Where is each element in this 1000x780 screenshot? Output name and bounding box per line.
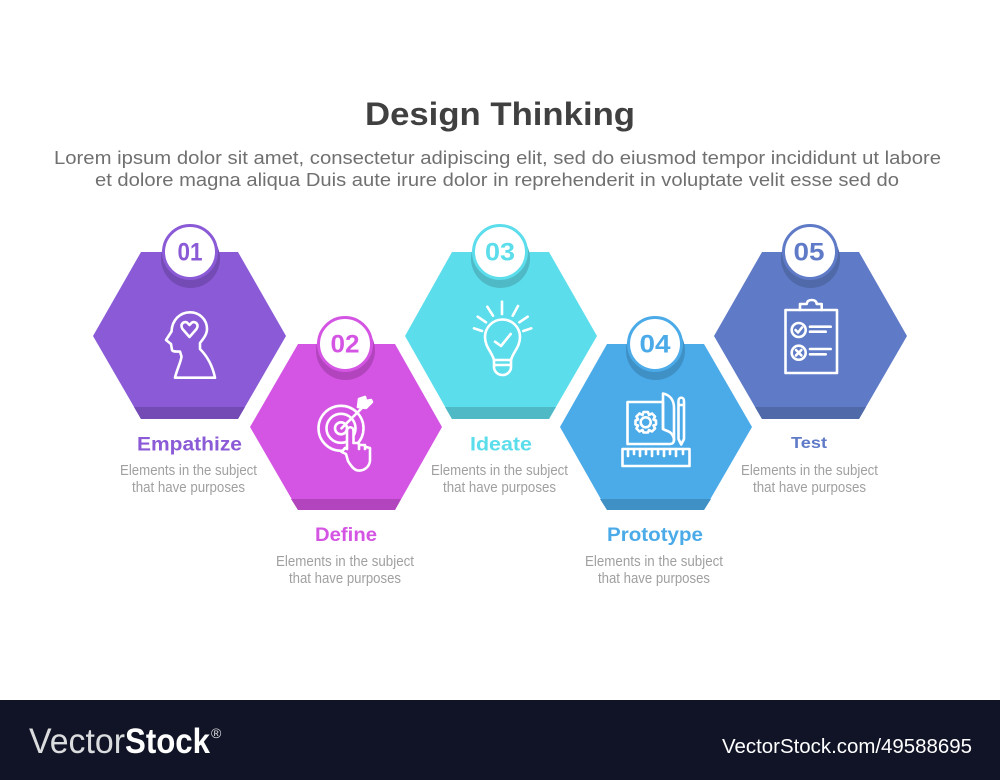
description 05: Elements in the subject bbox=[741, 463, 878, 479]
hexagon 04 bbox=[560, 344, 752, 510]
hexagon 03 base band bbox=[445, 407, 556, 419]
number badge 04: 04 bbox=[640, 331, 671, 359]
description 04: Elements in the subject bbox=[585, 554, 723, 570]
number badge 05 bbox=[781, 226, 840, 288]
hexagon 03 bbox=[405, 252, 597, 419]
subtitle text block bbox=[54, 147, 941, 190]
panel: step 03 Ideate bbox=[405, 226, 597, 496]
number badge 02 bbox=[316, 318, 375, 380]
icon: blueprint, gear, pencil and ruler bbox=[622, 394, 690, 466]
hexagon 05 bbox=[714, 252, 907, 419]
description 01: Elements in the subject bbox=[120, 463, 257, 479]
number badge 05: 05 bbox=[794, 239, 825, 267]
icon: clipboard checklist bbox=[786, 300, 837, 373]
hexagon 02 bbox=[250, 344, 442, 510]
label Define: Define bbox=[315, 525, 377, 546]
VectorStock logo: Stock bbox=[125, 722, 210, 761]
description 05: that have purposes bbox=[753, 480, 866, 496]
label Prototype: Prototype bbox=[607, 525, 703, 546]
description 01: that have purposes bbox=[132, 480, 245, 496]
hexagon 02 base band bbox=[291, 499, 401, 510]
title: Design Thinking bbox=[365, 96, 635, 132]
label Test: Test bbox=[791, 435, 828, 452]
panel: step 05 Test bbox=[714, 226, 907, 496]
description 02: that have purposes bbox=[289, 571, 401, 587]
description 05 bbox=[741, 463, 878, 496]
description 01 bbox=[120, 463, 257, 496]
description 02 bbox=[276, 554, 414, 587]
hexagon 01 bbox=[93, 252, 286, 419]
label Ideate: Ideate bbox=[470, 434, 532, 456]
description 04 bbox=[585, 554, 723, 587]
panel: step 02 Define bbox=[250, 318, 442, 587]
number badge 03: 03 bbox=[485, 239, 515, 267]
footer bar bbox=[0, 700, 1000, 780]
description 02: Elements in the subject bbox=[276, 554, 414, 570]
VectorStock logo: ® bbox=[211, 725, 222, 741]
VectorStock logo: Vector bbox=[29, 722, 125, 761]
description 04: that have purposes bbox=[598, 571, 710, 587]
number badge 01 bbox=[161, 226, 220, 288]
description 03: that have purposes bbox=[443, 480, 556, 496]
number badge 04 bbox=[626, 318, 685, 380]
icon: head with heart bbox=[166, 312, 215, 378]
label Empathize: Empathize bbox=[137, 434, 242, 456]
VectorStock logo bbox=[29, 722, 222, 761]
icon: target with hand bbox=[318, 397, 372, 471]
number badge 02: 02 bbox=[330, 331, 360, 359]
hexagon 01 base band bbox=[134, 407, 245, 419]
description 03: Elements in the subject bbox=[431, 463, 568, 479]
number badge 01: 01 bbox=[178, 239, 203, 267]
panel: step 01 Empathize bbox=[93, 226, 286, 496]
description 03 bbox=[431, 463, 568, 496]
subtitle text block: et dolore magna aliqua Duis aute irure dolor in reprehenderit in voluptate velit esse sed do bbox=[95, 169, 899, 190]
hexagon 04 base band bbox=[600, 499, 711, 510]
subtitle text block: Lorem ipsum dolor sit amet, consectetur adipiscing elit, sed do eiusmod tempor incididunt ut labore bbox=[54, 147, 941, 168]
hexagon 05 base band bbox=[755, 407, 866, 419]
image id: VectorStock.com/49588695 bbox=[722, 735, 972, 758]
number badge 03 bbox=[471, 226, 530, 288]
icon: light bulb with check bbox=[474, 302, 531, 375]
panel: step 04 Prototype bbox=[560, 318, 752, 587]
